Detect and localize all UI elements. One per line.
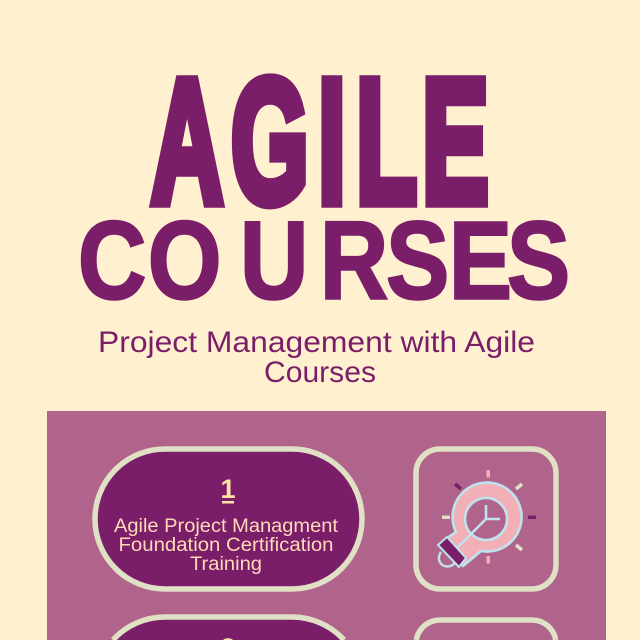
course 1 title: Foundation Certification: [118, 535, 334, 556]
subtitle: Project Management with Agile: [98, 326, 535, 359]
title: AGILE: AGILE: [151, 43, 489, 240]
panel: course list: [47, 411, 606, 640]
icon box 1: [416, 449, 556, 589]
icon box 2: [416, 620, 556, 640]
course 1 title: Training: [190, 554, 262, 575]
icon: light bulb with clock: [438, 470, 536, 567]
course 1 number: 1: [220, 474, 236, 504]
course 1 title: [114, 516, 339, 575]
title: COURSES: COURSES: [78, 199, 570, 322]
subtitle: Courses: [264, 356, 376, 389]
course 1 title: Agile Project Managment: [114, 516, 339, 537]
course 1 pill: [95, 449, 362, 589]
course 2 pill: [113, 617, 344, 640]
subtitle: [98, 326, 535, 389]
